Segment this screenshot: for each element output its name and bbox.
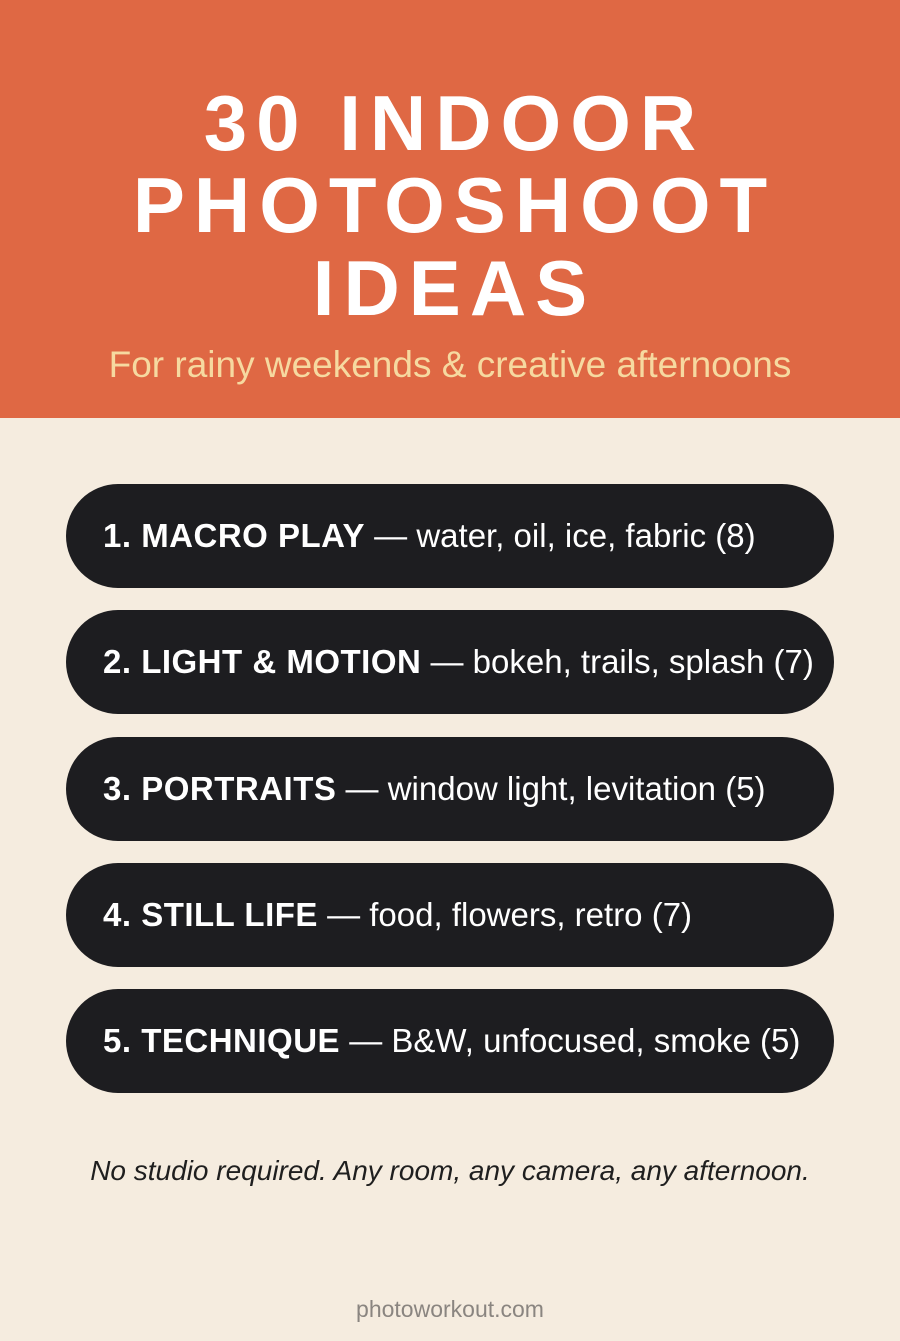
title: PHOTOSHOOT bbox=[133, 161, 776, 249]
pill: portraits: 3. PORTRAITS — window light, levitation (5) bbox=[103, 770, 766, 807]
title bbox=[133, 79, 776, 332]
pill: light & motion bbox=[66, 610, 834, 714]
pill: macro play: 1. MACRO PLAY — water, oil, ice, fabric (8) bbox=[103, 517, 756, 554]
source url: photoworkout.com bbox=[356, 1296, 544, 1322]
pill: portraits bbox=[66, 737, 834, 841]
pill: light & motion: 2. LIGHT & MOTION — bokeh, trails, splash (7) bbox=[103, 643, 814, 680]
pill: technique bbox=[66, 989, 834, 1093]
title: 30 INDOOR bbox=[204, 79, 705, 167]
pill: macro play bbox=[66, 484, 834, 588]
header banner bbox=[0, 0, 900, 418]
subtitle: For rainy weekends & creative afternoons bbox=[109, 344, 791, 385]
footer note: No studio required. Any room, any camera, any afternoon. bbox=[90, 1155, 810, 1186]
pill: still life: 4. STILL LIFE — food, flowers, retro (7) bbox=[103, 896, 692, 933]
pill: still life bbox=[66, 863, 834, 967]
pill: technique: 5. TECHNIQUE — B&W, unfocused, smoke (5) bbox=[103, 1022, 800, 1059]
title: IDEAS bbox=[313, 244, 596, 332]
